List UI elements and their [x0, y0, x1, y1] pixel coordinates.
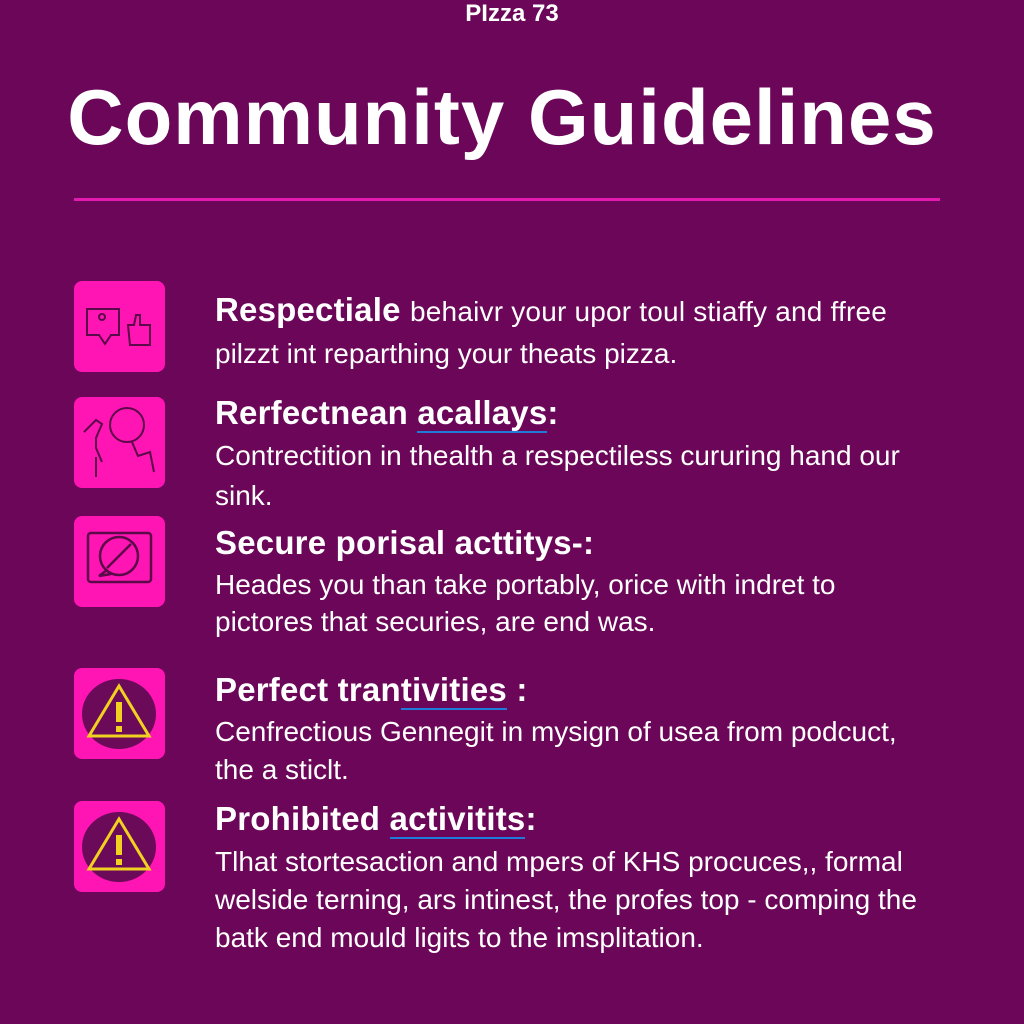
icon: prohibited chat	[74, 516, 165, 607]
text: Prohibited activitits:	[215, 800, 537, 837]
text: Contrectition in thealth a respectiless cururing hand our	[215, 440, 900, 471]
text: batk end mould ligits to the imsplitation.	[215, 922, 704, 953]
item 1	[215, 291, 887, 369]
text: Perfect trantivities :	[215, 671, 528, 708]
title: Community Guidelines	[67, 73, 937, 161]
icon: warning 2	[74, 801, 165, 892]
text: pictores that securies, are end was.	[215, 606, 655, 637]
item 4	[215, 671, 897, 785]
text: Tlhat stortesaction and mpers of KHS procuces,, formal	[215, 846, 903, 877]
text: Respectiale behaivr your upor toul stiaffy and ffree	[215, 291, 887, 328]
text: Secure porisal acttitys-:	[215, 524, 594, 561]
top label: PIzza 73	[465, 0, 559, 27]
text: welside terning, ars intinest, the profes top - comping the	[215, 884, 917, 915]
text: Rerfectnean acallays:	[215, 394, 559, 431]
text: Cenfrectious Gennegit in mysign of usea from podcuct,	[215, 716, 897, 747]
item 3	[215, 524, 836, 637]
icon: hands	[74, 397, 165, 488]
text: Heades you than take portably, orice with indret to	[215, 569, 836, 600]
icon: chat and thumbs up	[74, 281, 165, 372]
text: sink.	[215, 480, 273, 511]
icon: warning 1	[74, 668, 165, 759]
text: the a sticlt.	[215, 754, 349, 785]
text: pilzzt int reparthing your theats pizza.	[215, 338, 677, 369]
item 5	[215, 800, 917, 953]
item 2	[215, 394, 900, 511]
